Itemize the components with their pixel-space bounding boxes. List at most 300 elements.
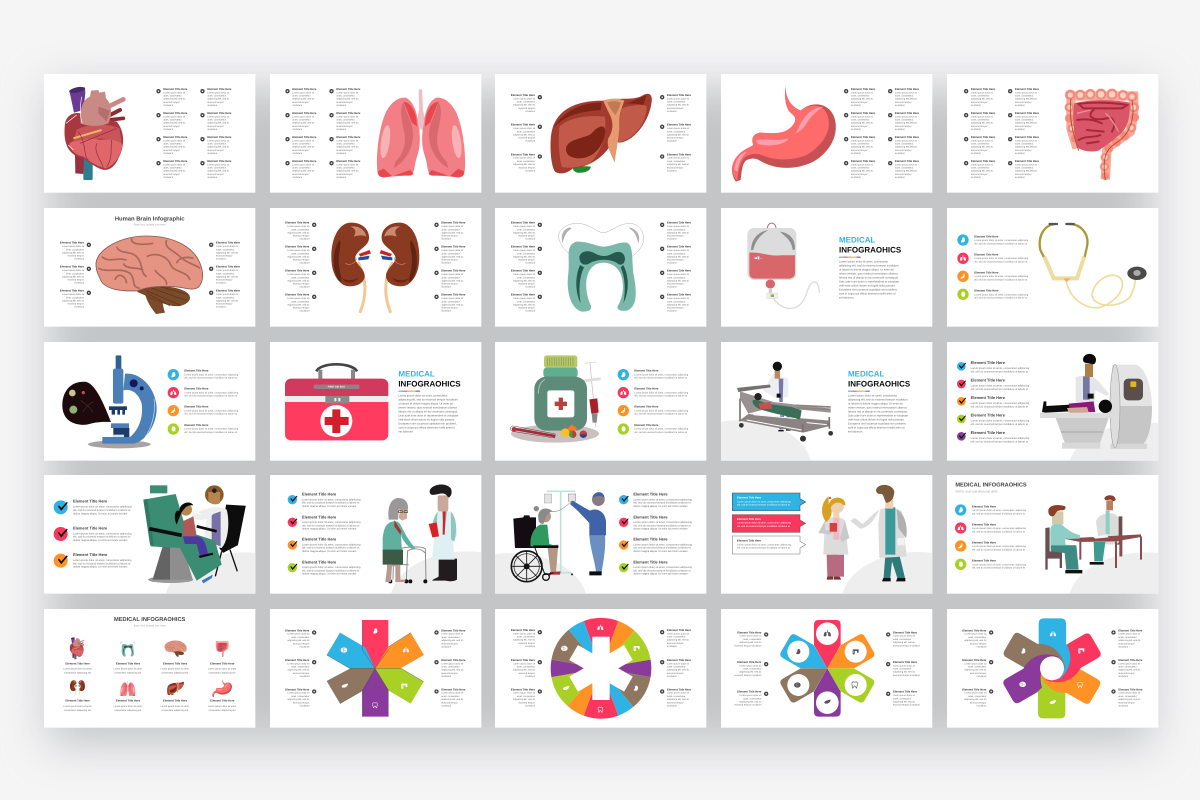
heading and paragraph: ut labore et dolore magna aliqua. Ut enim ad — [839, 268, 894, 271]
text block — [660, 269, 707, 289]
text block: eiusmod tempor — [851, 173, 867, 176]
heading and paragraph: sunt in culpa qui officia deserunt mollit anim id — [839, 292, 895, 295]
heading: MEDICAL INFOGRAOHICS — [955, 482, 1026, 488]
text block: adipiscing elit, sed do — [287, 639, 309, 642]
text block — [269, 628, 316, 649]
text block: incididunt — [441, 675, 451, 678]
text block — [434, 269, 481, 289]
text block: eiusmod tempor — [971, 173, 987, 176]
text block: eiusmod tempor — [336, 101, 352, 104]
text block: Lorem ipsum dolor sit — [513, 225, 535, 228]
text block — [964, 111, 1011, 131]
text block: Element Title Here — [60, 265, 84, 268]
text block — [269, 245, 316, 265]
heading and paragraph: Lorem ipsum dolor sit amet, consectetur — [398, 394, 447, 397]
text block: adipiscing elit, sed do — [851, 146, 873, 148]
panel: dental chair — [44, 475, 255, 594]
text block: elit, sed do eiusmod tempor incididunt ut labore et — [970, 387, 1028, 390]
text block: Lorem ipsum dolor sit amet, consectetur adipiscing — [737, 500, 791, 503]
text block: amet, consectetur — [292, 119, 310, 121]
text block: amet, consectetur — [971, 119, 989, 121]
text block: amet, consectetur — [968, 636, 986, 639]
text block: adipiscing elit, sed do — [441, 698, 463, 701]
text block: Lorem ipsum dolor sit amet, consectetur adipiscing — [970, 436, 1029, 439]
text block: incididunt — [1015, 152, 1024, 155]
text block: incididunt — [851, 128, 861, 131]
text block: incididunt — [441, 310, 451, 312]
text block: Lorem ipsum dolor sit — [851, 92, 873, 94]
text block: incididunt — [207, 128, 217, 131]
text block — [844, 135, 891, 155]
panel: wheelchair — [495, 475, 706, 594]
text block: adipiscing elit, sed do — [739, 701, 761, 703]
heading and paragraph: sunt in culpa qui officia deserunt mollit anim id — [848, 426, 904, 429]
text block: amet, consectetur — [441, 229, 459, 231]
text block: incididunt — [895, 128, 905, 131]
text block: incididunt — [667, 110, 677, 113]
text block: Lorem ipsum dolor sit — [441, 663, 463, 665]
panel: swirl diagram — [947, 609, 1158, 728]
text block: eiusmod tempor — [441, 643, 457, 645]
text block: eiusmod tempor — [519, 642, 535, 645]
text block: eiusmod tempor — [519, 167, 535, 169]
text block: eiusmod tempor incididunt — [893, 645, 920, 647]
panel: hospital bed — [721, 342, 932, 460]
text block: Lorem ipsum dolor sit amet, — [114, 705, 142, 708]
illustration: stomach — [732, 86, 836, 182]
text block: Element Title Here — [667, 688, 691, 691]
text block — [1008, 87, 1055, 107]
text block: Lorem ipsum dolor sit — [287, 249, 309, 252]
text block: incididunt — [667, 170, 677, 172]
text block: Element Title Here — [207, 135, 231, 139]
text block: elit, sed do eiusmod tempor incididunt ut labore et — [633, 524, 691, 527]
text block: amet, consectetur — [441, 666, 459, 668]
text block: adipiscing elit, sed do — [207, 146, 229, 148]
text block: Element Title Here — [971, 135, 995, 139]
text block — [886, 660, 933, 677]
text block — [660, 293, 707, 313]
text block: eiusmod tempor — [216, 279, 232, 281]
text block: dolore magna aliqua. Ut enim ad minim veniam — [302, 505, 356, 508]
text block: elit, sed do eiusmod tempor incididunt ut labore et — [634, 376, 687, 379]
text block: eiusmod tempor — [519, 107, 535, 110]
text block: elit, sed do eiusmod tempor incididunt ut labore et — [970, 405, 1028, 408]
text block — [1008, 111, 1055, 131]
text block: eiusmod tempor — [970, 643, 986, 645]
text block: Lorem ipsum dolor sit — [62, 245, 84, 248]
text block: incididunt — [1015, 104, 1024, 107]
text block: amet, consectetur — [971, 95, 989, 97]
text block: adipiscing elit, sed do — [964, 639, 986, 642]
text block — [285, 111, 332, 131]
text block: elit, sed do eiusmod tempor incididunt ut labore et — [970, 422, 1028, 425]
text block: eiusmod tempor — [519, 307, 535, 309]
text block: Lorem ipsum dolor sit — [1015, 164, 1037, 166]
text block: Element Title Here — [285, 293, 309, 296]
text block: Lorem ipsum dolor sit — [667, 663, 689, 665]
text block: amet, consectetur — [517, 131, 535, 133]
text block: amet, consectetur — [291, 277, 309, 279]
text block: Element Title Here — [292, 135, 316, 139]
text block: adipiscing elit, sed do — [1118, 669, 1140, 671]
text block — [970, 413, 1029, 426]
text block: Lorem ipsum dolor sit — [336, 92, 358, 94]
text block: incididunt — [971, 128, 980, 131]
text block: amet, consectetur — [893, 668, 911, 670]
text block: adipiscing elit, sed do — [513, 698, 535, 701]
text block: eiusmod tempor — [441, 672, 457, 675]
text block: adipiscing elit, sed do — [851, 98, 873, 100]
text block: Lorem ipsum dolor sit — [62, 269, 84, 272]
text block: Element Title Here — [737, 631, 761, 634]
panel: consultation table — [947, 475, 1158, 594]
text block — [946, 687, 993, 708]
heading and paragraph: laboris nisi ut aliquip ex ea commodo consequat. — [839, 276, 899, 279]
text block: Element Title Here — [1015, 111, 1039, 115]
text block: incididunt — [667, 140, 677, 142]
text block: incididunt — [1118, 675, 1128, 678]
text block: adipiscing elit, sed do — [287, 280, 309, 282]
text block — [329, 135, 376, 155]
text block: Lorem ipsum dolor sit amet, consectetur adipiscing — [634, 373, 688, 376]
text block: incididunt — [163, 104, 173, 107]
text block: eiusmod tempor — [519, 137, 535, 139]
text block: Element Title Here — [184, 369, 208, 372]
text block: elit, sed do eiusmod tempor incididunt ut labore et — [974, 242, 1027, 245]
text block: amet, consectetur — [292, 167, 310, 169]
text block: incididunt — [74, 282, 84, 284]
text block — [660, 658, 707, 678]
text block: Lorem ipsum dolor sit — [667, 249, 689, 252]
chart: six swirl blades — [947, 609, 1158, 728]
text block: Lorem ipsum dolor sit — [1118, 633, 1140, 635]
text block: Element Title Here — [184, 423, 208, 426]
text block: elit, sed do eiusmod tempor incididunt ut labore et — [302, 547, 359, 550]
panel: lungs — [270, 74, 481, 193]
text block: amet, consectetur — [441, 253, 459, 255]
text block: incididunt — [216, 282, 226, 284]
illustration: first aid kit: FIRST AID BAG — [327, 386, 345, 388]
text block — [434, 658, 481, 678]
text block: incididunt — [851, 104, 861, 107]
text block: Element Title Here — [216, 265, 240, 268]
text block: incididunt — [207, 176, 217, 179]
text block: amet, consectetur — [291, 301, 309, 303]
text block: amet, consectetur — [893, 698, 911, 700]
text block: eiusmod tempor — [292, 125, 308, 128]
text block: eiusmod tempor — [293, 702, 309, 704]
text block: incididunt — [441, 705, 451, 707]
text block: Element Title Here — [895, 87, 919, 91]
text block: adipiscing elit, sed do — [287, 232, 309, 234]
text block: amet, consectetur — [163, 119, 182, 121]
organ icons — [44, 609, 255, 728]
text block — [737, 539, 800, 550]
text block: incididunt — [525, 262, 535, 264]
text block — [1008, 135, 1055, 155]
text block: amet, consectetur — [1015, 95, 1033, 97]
text block — [970, 395, 1029, 408]
panel: six arrows diagram — [270, 609, 481, 728]
text block — [44, 241, 91, 261]
text block: amet, consectetur — [291, 695, 309, 698]
text block: Element Title Here — [851, 159, 875, 163]
text block: Lorem ipsum dolor sit amet, consectetur adipiscing — [302, 566, 360, 569]
text block: adipiscing elit, sed do — [893, 701, 915, 703]
text block: adipiscing elit, sed do — [895, 122, 917, 124]
text block — [495, 628, 542, 648]
text block: adipiscing elit, sed do — [441, 280, 463, 282]
text block: Element Title Here — [441, 658, 465, 662]
text block: adipiscing elit, sed do — [1015, 122, 1037, 124]
text block: adipiscing elit, sed do — [62, 300, 84, 302]
text block: elit, sed do eiusmod tempor incididunt ut labore et — [972, 512, 1025, 515]
panel: petal diagram — [721, 609, 932, 728]
text block: Element Title Here — [667, 153, 691, 156]
text block: Lorem ipsum dolor sit — [851, 140, 873, 142]
text block: Element Title Here — [667, 245, 691, 248]
text block: amet, consectetur — [968, 695, 986, 698]
text block — [184, 423, 238, 434]
text block — [58, 661, 98, 675]
text block: Element Title Here — [441, 269, 465, 272]
text block: adipiscing elit, sed do — [667, 304, 689, 306]
text block: eiusmod tempor — [293, 259, 309, 261]
text block: dolore magna aliqua. Ut enim ad minim veniam — [633, 572, 688, 575]
text block: Lorem ipsum dolor sit — [441, 273, 463, 276]
text block: Lorem ipsum dolor sit — [441, 249, 463, 252]
text block: Lorem ipsum dolor sit — [287, 273, 309, 276]
text block: elit, sed do eiusmod tempor incididunt ut labore et — [737, 546, 790, 549]
text block — [974, 289, 1028, 299]
text block: Lorem ipsum dolor sit — [667, 98, 689, 100]
text block: incididunt — [336, 152, 346, 155]
panel: callout boxes and doctors — [721, 475, 932, 594]
text block: Lorem ipsum dolor sit — [207, 164, 229, 166]
text block: elit, sed do eiusmod tempor incididunt ut labore et — [970, 440, 1028, 443]
text block: Lorem ipsum dolor sit amet, consectetur adipiscing — [737, 522, 791, 525]
text block: Element Title Here — [66, 662, 90, 665]
text block: Lorem ipsum dolor sit amet, consectetur adipiscing — [73, 559, 132, 562]
heading and paragraph: velit esse cillum dolore eu fugiat nulla pariatur. — [848, 418, 905, 421]
text block: Element Title Here — [1015, 159, 1039, 163]
text block: Element Title Here — [972, 541, 996, 544]
illustration: liver — [550, 94, 652, 174]
text block: Element Title Here — [970, 430, 1005, 435]
text block: Lorem ipsum dolor sit — [667, 127, 689, 130]
text block: amet, consectetur — [207, 95, 226, 97]
text block — [634, 387, 688, 397]
text block: amet, consectetur — [1015, 167, 1033, 169]
text block: Element Title Here — [667, 269, 691, 272]
text block — [495, 93, 542, 113]
text block: adipiscing elit, sed do — [441, 639, 463, 642]
heading and paragraph: ut labore et dolore magna aliqua. Ut enim ad — [848, 402, 903, 405]
text block: eiusmod tempor — [667, 702, 683, 704]
text block: amet, consectetur — [336, 143, 354, 145]
text block: Lorem ipsum dolor sit amet, — [63, 705, 92, 708]
text block: Element Title Here — [66, 699, 90, 702]
text block — [844, 159, 891, 179]
text block: incididunt — [971, 176, 980, 179]
text block: adipiscing elit, sed do — [513, 163, 535, 166]
text block: incididunt — [299, 262, 309, 264]
text block: amet, consectetur — [851, 95, 869, 97]
text block: eiusmod tempor — [207, 173, 224, 176]
text block: Element Title Here — [667, 221, 691, 224]
text block — [495, 269, 542, 289]
text block: consectetur adipiscing elit. — [161, 672, 189, 674]
text block: Lorem ipsum dolor sit — [163, 116, 185, 118]
heading and paragraph: MEDICAL — [839, 235, 875, 244]
text block: elit, sed do eiusmod tempor incididunt ut labore et — [737, 525, 790, 528]
text block: incididunt — [163, 176, 173, 179]
panel: stethoscope — [947, 208, 1158, 327]
heading and paragraph: est laborum. — [848, 430, 863, 433]
text block — [972, 523, 1035, 534]
text block: Element Title Here — [972, 523, 996, 526]
text block: elit, sed do eiusmod tempor incididunt ut labore et — [634, 430, 687, 433]
text block: elit, sed do eiusmod tempor incididunt ut labore et — [972, 530, 1025, 533]
text block: Element Title Here — [962, 688, 986, 691]
text block — [633, 560, 700, 576]
text block: Element Title Here — [895, 159, 919, 163]
text block: Element Title Here — [893, 660, 917, 664]
text block: Lorem ipsum dolor sit — [292, 92, 314, 94]
text block: adipiscing elit, sed do — [971, 146, 993, 148]
text block: Lorem ipsum dolor sit — [513, 297, 535, 300]
text block — [633, 492, 700, 508]
text block: consectetur adipiscing elit. — [64, 709, 91, 712]
text block: dolore magna aliqua. Ut enim ad minim veniam — [73, 539, 127, 542]
text block: Lorem ipsum dolor sit — [1015, 116, 1037, 118]
text block — [44, 265, 91, 285]
text block: eiusmod tempor — [667, 672, 683, 675]
text block: adipiscing elit, sed do — [667, 669, 689, 671]
text block: incididunt — [895, 104, 905, 107]
text block: Lorem ipsum dolor sit — [292, 116, 314, 118]
text block: Element Title Here — [737, 496, 761, 500]
text block: Lorem ipsum dolor sit — [287, 692, 309, 694]
text block: Element Title Here — [511, 221, 535, 224]
text block: Element Title Here — [207, 159, 231, 163]
heading and paragraph: minim veniam, quis nostrud exercitation ullamco — [839, 272, 898, 275]
text block: eiusmod tempor — [292, 173, 308, 176]
text block: eiusmod tempor — [441, 702, 457, 704]
text block — [634, 369, 688, 379]
text block — [974, 235, 1028, 245]
text block: adipiscing elit, sed do — [513, 304, 535, 306]
text block: Lorem ipsum dolor sit amet, consectetur adipiscing — [974, 239, 1028, 242]
text block — [633, 537, 700, 553]
text block: Element Title Here — [511, 688, 535, 691]
text block: amet, consectetur — [1118, 666, 1136, 668]
text block: Element Title Here — [302, 560, 336, 564]
heading and paragraph — [839, 235, 901, 299]
text block: Element Title Here — [970, 360, 1005, 365]
text block: Lorem ipsum dolor sit — [1118, 663, 1140, 665]
illustration: blood bag — [747, 222, 820, 309]
text block — [964, 159, 1011, 179]
text block: Lorem ipsum dolor sit — [667, 225, 689, 228]
text block: incididunt — [525, 310, 535, 312]
text block — [285, 159, 332, 179]
text block — [269, 293, 316, 313]
text block: Lorem ipsum dolor sit — [513, 663, 535, 665]
heading and paragraph: Lorem ipsum dolor sit amet, consectetur — [848, 394, 897, 397]
text block: eiusmod tempor — [1118, 672, 1134, 675]
text block: Element Title Here — [893, 631, 917, 634]
text block: incididunt — [667, 645, 677, 648]
text block: Lorem ipsum dolor sit — [667, 273, 689, 276]
text block: Element Title Here — [216, 289, 240, 292]
text block: amet, consectetur — [743, 638, 761, 641]
text block — [269, 269, 316, 289]
text block: amet, consectetur — [667, 695, 685, 698]
text block: adipiscing elit, sed do — [513, 256, 535, 258]
text block: Element Title Here — [285, 629, 309, 632]
text block — [184, 387, 238, 397]
text block: amet, consectetur — [163, 143, 182, 145]
text block: eiusmod tempor incididunt — [893, 674, 920, 677]
text block — [495, 152, 542, 173]
text block — [1111, 628, 1158, 649]
text block: elit, sed do eiusmod tempor incididunt ut labore et — [302, 569, 359, 572]
illustration: tooth — [558, 223, 644, 312]
text block: Element Title Here — [971, 111, 995, 115]
text block: Element Title Here — [73, 499, 107, 504]
text block: Element Title Here — [851, 111, 875, 115]
text block — [209, 265, 256, 285]
text block: eiusmod tempor — [293, 643, 309, 645]
text block: incididunt — [895, 152, 905, 155]
text block: Element Title Here — [974, 235, 998, 238]
text block: amet, consectetur — [667, 277, 685, 279]
text block — [974, 271, 1028, 281]
text block: consectetur adipiscing elit. — [209, 672, 236, 674]
text block — [155, 661, 195, 675]
text block: adipiscing elit, sed do — [964, 669, 986, 671]
text block: Element Title Here — [737, 539, 761, 543]
text block: elit, sed do eiusmod tempor incididunt ut labore et — [73, 509, 130, 512]
text block: amet, consectetur — [968, 666, 986, 668]
text block: amet, consectetur — [851, 143, 869, 145]
text block: amet, consectetur — [851, 119, 869, 121]
text block: Lorem ipsum dolor sit amet, consectetur adipiscing — [634, 391, 688, 394]
text block — [660, 245, 707, 265]
text block: Element Title Here — [292, 87, 316, 91]
text block: Lorem ipsum dolor sit amet, consectetur adipiscing — [634, 427, 688, 430]
text block: Element Title Here — [302, 537, 336, 542]
text block: Lorem ipsum dolor sit amet, consectetur adipiscing — [974, 257, 1028, 260]
text block: Element Title Here — [60, 289, 84, 292]
text block: Element Title Here — [60, 241, 84, 244]
text block: eiusmod tempor — [667, 642, 683, 645]
text block: Lorem ipsum dolor sit — [513, 127, 535, 130]
text block: Lorem ipsum dolor sit amet, consectetur adipiscing — [184, 373, 238, 376]
text block: amet, consectetur — [336, 95, 354, 97]
text block: Lorem ipsum dolor sit amet, consectetur adipiscing — [184, 409, 238, 412]
text block: amet, consectetur — [667, 253, 685, 255]
text block: consectetur adipiscing elit. — [64, 672, 91, 674]
text block: eiusmod tempor — [336, 149, 352, 152]
text block: Lorem ipsum dolor sit amet, consectetur adipiscing — [302, 543, 360, 546]
text block: Element Title Here — [667, 628, 691, 632]
text block: incididunt — [292, 104, 302, 107]
heading: MEDICAL INFOGRAOHICS — [114, 616, 185, 622]
text block: Lorem ipsum dolor sit — [895, 140, 917, 142]
